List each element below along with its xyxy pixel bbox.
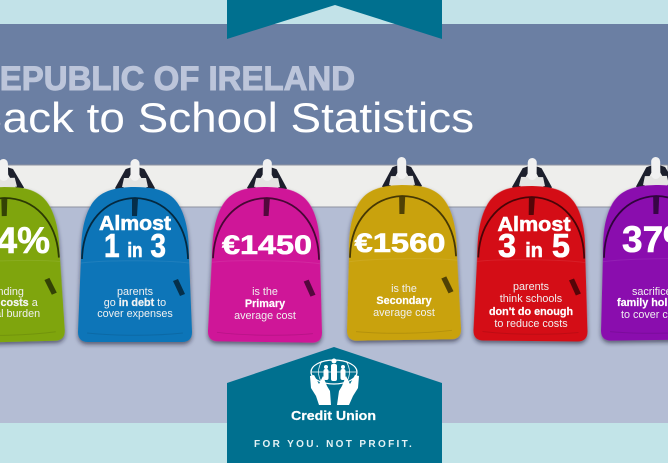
stat: €1560 [354,228,446,258]
backpack: red almost 3 in 5 [473,157,589,342]
description: to reduce costs [494,318,568,330]
top light blue band [0,0,668,24]
bottom teal house panel [227,347,442,463]
description: parents [513,281,550,293]
description [373,283,435,319]
header panel [0,24,668,165]
description: is the [252,286,278,298]
backpack: yellow €1560 [345,156,461,341]
stat [99,213,171,264]
description: go in debt to [104,297,166,309]
bottom light blue band [0,423,668,463]
white shelf [0,165,668,207]
stat: 1 in 3 [104,227,166,264]
description [617,286,668,321]
backpack: blue almost 1 in 3 [78,159,192,342]
description [489,281,573,330]
stat: Almost [498,214,571,236]
tagline: FOR YOU. NOT PROFIT. [254,439,414,450]
icon: Credit Union logo [310,358,359,405]
stat: €1450 [222,230,312,260]
description [97,286,173,320]
top teal ribbon [227,0,442,39]
description: average cost [373,307,435,319]
description: is the [391,283,417,295]
description: think schools [500,293,563,305]
brand name: Credit Union [291,408,376,423]
description: don't do enough [489,306,573,318]
stat: Almost [99,213,171,235]
lower background [0,207,668,423]
backpack: green 84% [0,158,65,343]
description: average cost [234,310,296,322]
description: parents [117,286,154,298]
stat: 3 in 5 [498,227,570,264]
description [0,286,40,320]
backpack: purple 37% [599,156,668,341]
backpack: magenta €1450 [208,158,324,343]
description: Primary [245,298,285,310]
description: cover expenses [97,308,173,320]
description [234,286,296,322]
description: Secondary [376,295,432,307]
